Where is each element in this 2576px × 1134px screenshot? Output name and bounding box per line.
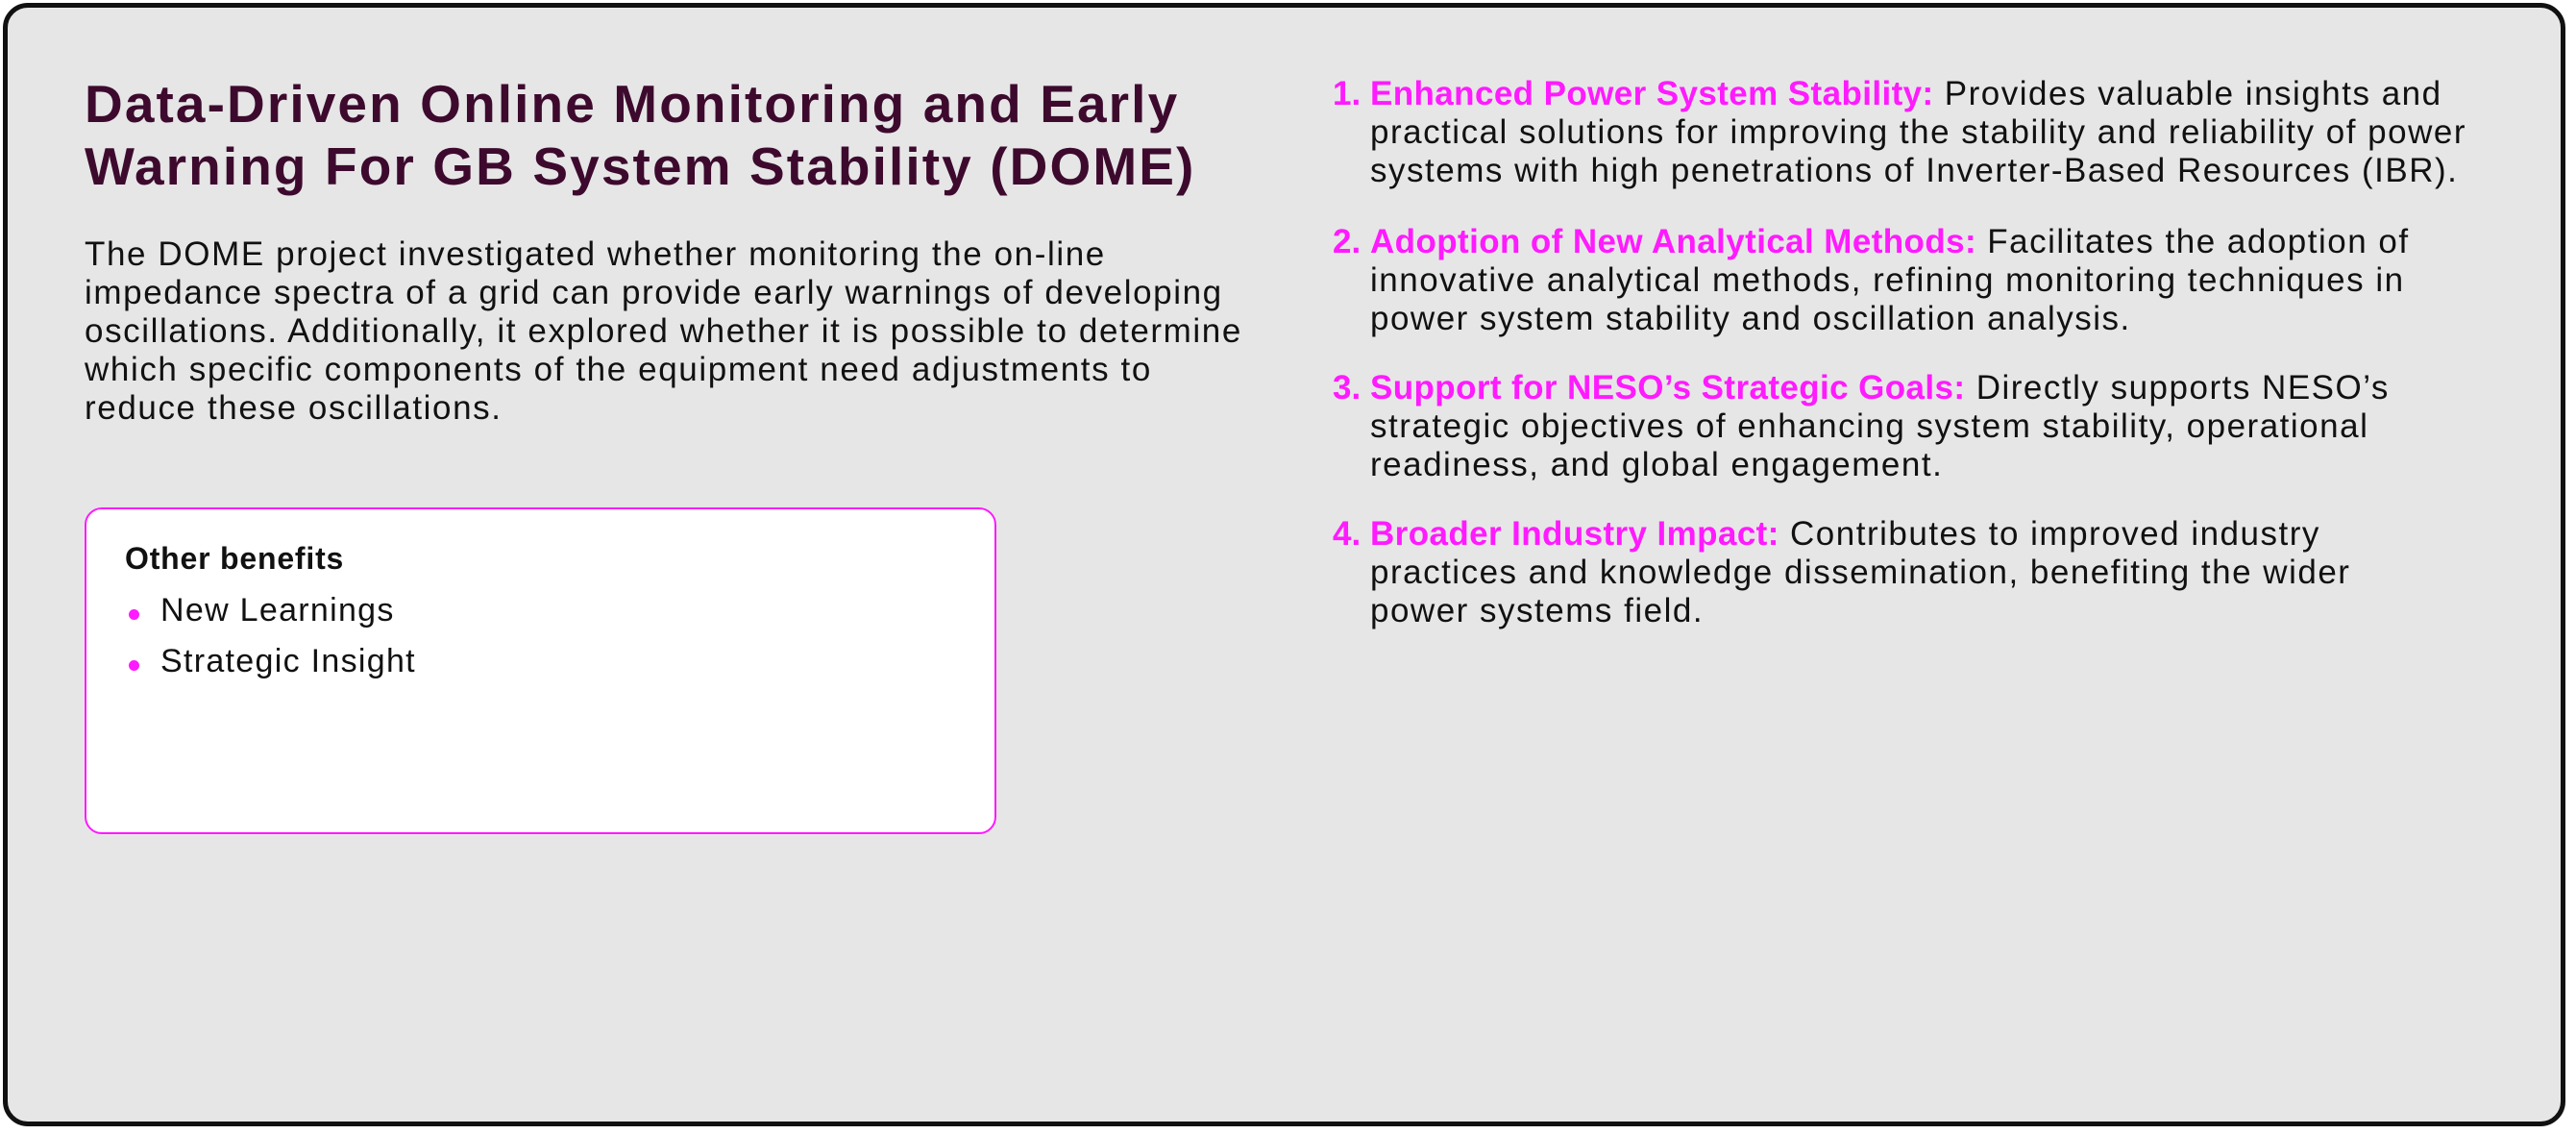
list item 2: innovative analytical methods, refining monitoring techniques in: [1370, 261, 2405, 299]
list item 1: [1333, 75, 2466, 189]
bullet: strategic insight: [129, 643, 416, 679]
bullet: new learnings: [129, 592, 395, 629]
title: [85, 74, 1195, 196]
heading: other benefits: Other benefits: [125, 541, 344, 576]
title: Data-Driven Online Monitoring and Early: [85, 74, 1179, 134]
list item 2: 2.: [1333, 223, 1361, 260]
list item 1: Enhanced Power System Stability: Provides valuable insights and: [1370, 75, 2442, 112]
list item 2: Adoption of New Analytical Methods: Facilitates the adoption of: [1370, 223, 2410, 260]
list item 3: strategic objectives of enhancing system stability, operational: [1370, 407, 2368, 445]
list item 1: 1.: [1333, 75, 1361, 112]
panel: other benefits: Strategic Insight: [160, 643, 416, 679]
text block: project description: impedance spectra of a grid can provide early warnings of developing: [85, 274, 1223, 311]
list item 4: [1333, 515, 2350, 629]
panel: other benefits: [85, 507, 996, 834]
list item 4: practices and knowledge dissemination, benefiting the wider: [1370, 554, 2350, 591]
list item 1: practical solutions for improving the stability and reliability of power: [1370, 113, 2466, 151]
list item 2: power system stability and oscillation analysis.: [1370, 300, 2131, 337]
text block: project description: which specific components of the equipment need adjustments to: [85, 351, 1152, 388]
text block: project description: reduce these oscillations.: [85, 389, 503, 427]
panel: other benefits: New Learnings: [160, 592, 395, 629]
list item 4: Broader Industry Impact: Contributes to improved industry: [1370, 515, 2320, 553]
text block: project description: The DOME project investigated whether monitoring the on-line: [85, 235, 1106, 273]
list item 1: systems with high penetrations of Inverter-Based Resources (IBR).: [1370, 152, 2458, 189]
list item 3: [1333, 369, 2390, 483]
text block: project description: oscillations. Additionally, it explored whether it is possible to determine: [85, 312, 1242, 350]
title: Warning For GB System Stability (DOME): [85, 136, 1195, 196]
list item 3: 3.: [1333, 369, 1361, 407]
list item 3: readiness, and global engagement.: [1370, 446, 1943, 483]
list item 3: Support for NESO’s Strategic Goals: Directly supports NESO’s: [1370, 369, 2390, 407]
list item 4: power systems field.: [1370, 592, 1704, 629]
list item 4: 4.: [1333, 515, 1361, 553]
text block: project description: [85, 235, 1242, 427]
list item 2: [1333, 223, 2410, 337]
